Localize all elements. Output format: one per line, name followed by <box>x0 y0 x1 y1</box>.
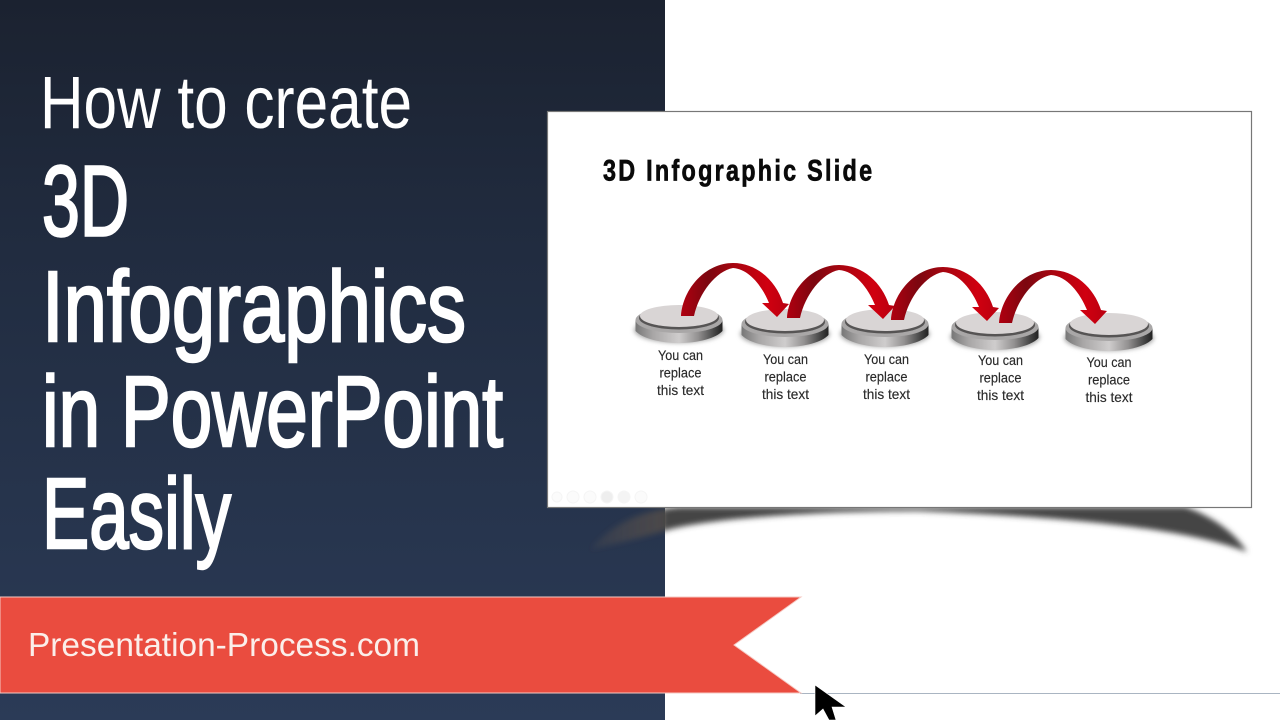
slideshow toolbar icons <box>552 491 647 503</box>
label 1 <box>657 347 704 398</box>
label 3 <box>863 351 910 402</box>
label 4: You can <box>978 352 1023 368</box>
main title <box>40 61 503 570</box>
title line: 3D: 3D <box>42 146 129 258</box>
title line: Easily: Easily <box>42 458 231 570</box>
arrow 2 to 3 <box>787 265 895 319</box>
title line: Infographics: Infographics <box>42 251 466 363</box>
ribbon text: Presentation-Process.com <box>28 626 420 663</box>
icon: mouse cursor <box>815 685 846 720</box>
platform 5 <box>1064 313 1154 351</box>
platform 2 <box>740 309 830 347</box>
platform 1 <box>634 305 724 343</box>
slide preview panel <box>548 112 1252 508</box>
ribbon shape <box>0 597 801 693</box>
slide shadow <box>590 507 1247 552</box>
arrow 4 to 5 <box>999 270 1107 324</box>
label 5: this text <box>1086 389 1133 405</box>
label 4 <box>977 352 1024 403</box>
title line: How to create: How to create <box>40 61 412 144</box>
label 1: replace <box>660 364 702 380</box>
label 2: this text <box>762 386 809 402</box>
left navy panel <box>0 0 665 720</box>
label 2: replace <box>764 368 807 384</box>
ribbon banner <box>0 597 801 693</box>
platform 4 <box>950 312 1040 350</box>
platform 3 <box>840 309 930 347</box>
label 3: this text <box>863 386 910 402</box>
title line: in PowerPoint: in PowerPoint <box>42 356 503 468</box>
label 5: You can <box>1086 354 1132 370</box>
label 5: replace <box>1088 372 1130 388</box>
label 1: this text <box>657 382 704 398</box>
arrow 1 to 2 <box>681 263 789 317</box>
label 4: replace <box>980 370 1022 386</box>
label 1: You can <box>658 347 703 363</box>
label 2: You can <box>763 351 808 367</box>
slide heading: 3D Infographic Slide <box>603 154 872 187</box>
label 3: replace <box>866 368 908 384</box>
label 2 <box>762 351 809 402</box>
slide background <box>548 112 1252 508</box>
thin baseline rule <box>800 693 1280 694</box>
label 4: this text <box>977 387 1024 403</box>
label 5 <box>1086 354 1133 405</box>
label 3: You can <box>864 351 909 367</box>
arrow 3 to 4 <box>891 267 999 321</box>
